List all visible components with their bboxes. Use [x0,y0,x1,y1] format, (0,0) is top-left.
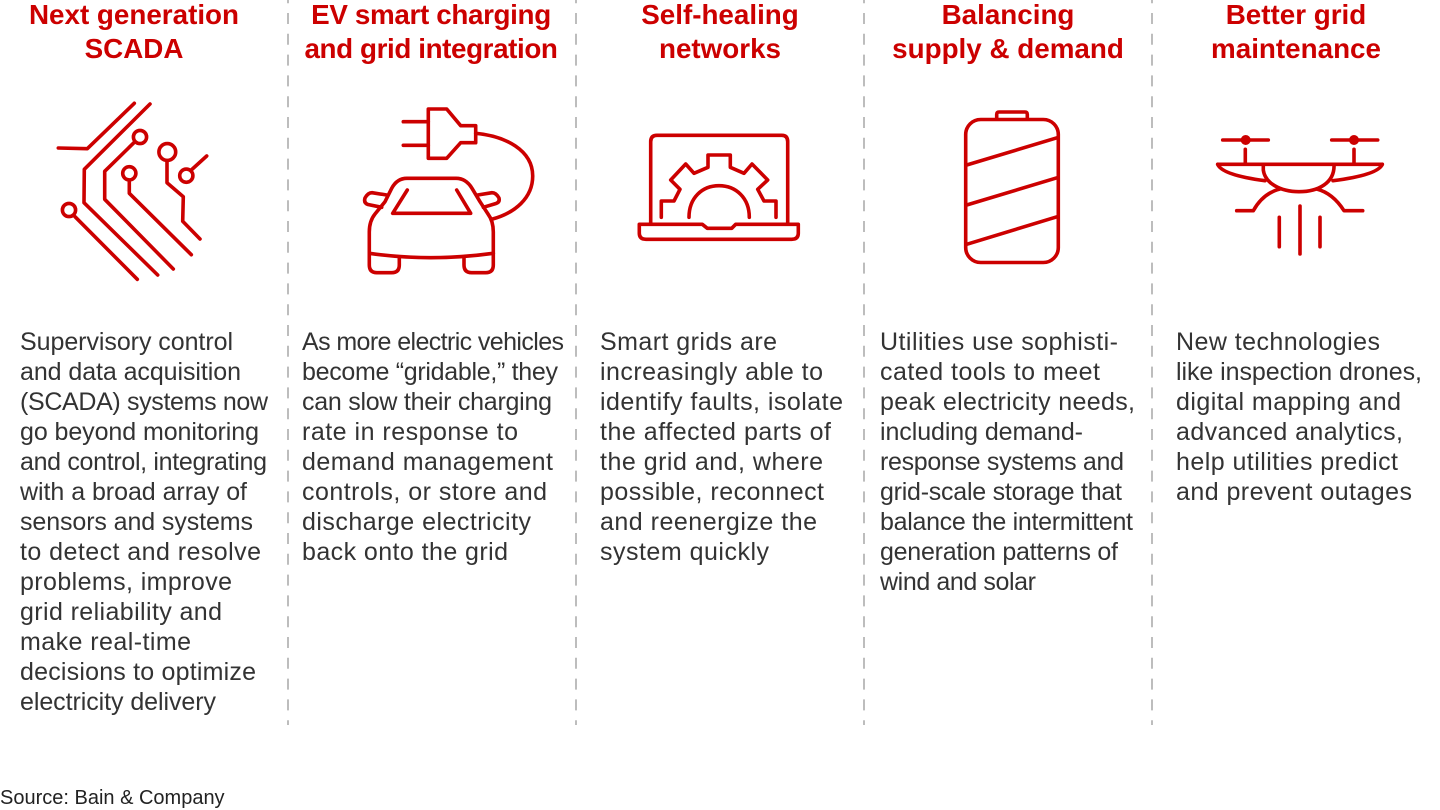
heading: self-healing networks: networks [659,33,781,64]
text: EV description [302,328,564,566]
text: self-healing description: increasingly able to [600,358,823,386]
heading: balancing supply and demand: supply & demand [892,33,1124,64]
text: self-healing description: Smart grids are [600,328,777,356]
text: SCADA description: (SCADA) systems now [20,388,269,416]
text: EV description: become “gridable,” they [302,358,558,386]
text: EV description: demand management [302,448,553,476]
text: balancing description: including demand- [880,418,1083,446]
text: self-healing description: the grid and, where [600,448,823,476]
text: maintenance description [1176,328,1422,506]
text: balancing description: response systems and [880,448,1124,476]
text: SCADA description: make real-time [20,628,191,656]
text: balancing description [879,328,1135,596]
text: maintenance description: digital mapping and [1176,388,1401,416]
text: balancing description: balance the intermittent [880,508,1133,536]
text: EV description: back onto the grid [302,538,508,566]
text: SCADA description: problems, improve [20,568,232,596]
text: self-healing description: the affected parts of [600,418,831,446]
icon: laptop with gear [638,134,800,242]
text: SCADA description: electricity delivery [20,688,216,716]
text: SCADA description: Supervisory control [20,328,233,356]
text: maintenance description: like inspection drones, [1176,358,1422,386]
text: SCADA description: grid reliability and [20,598,222,626]
icon: electric car with plug [362,107,534,274]
text: SCADA description: and control, integrating [20,448,267,476]
text: SCADA description: go beyond monitoring [20,418,259,446]
panel: EV smart charging [302,0,564,566]
text: EV description: As more electric vehicles [302,328,564,356]
heading: EV smart charging [304,0,557,64]
heading: better grid maintenance: maintenance [1211,33,1381,64]
source note: Source: Bain & Company [0,787,225,809]
text: SCADA description: to detect and resolve [20,538,261,566]
panel: better grid maintenance [1176,0,1422,506]
text: self-healing description: and reenergize the [600,508,817,536]
heading: self-healing networks [641,0,799,64]
heading: next generation SCADA [29,0,239,64]
text: balancing description: grid-scale storage that [880,478,1122,506]
text: self-healing description: system quickly [600,538,770,566]
text: balancing description: Utilities use sophisti- [880,328,1118,356]
text: EV description: controls, or store and [302,478,547,506]
text: self-healing description [600,328,843,566]
heading: better grid maintenance [1211,0,1381,64]
heading: balancing supply and demand [892,0,1124,64]
text: SCADA description: decisions to optimize [20,658,256,686]
panel: self-healing networks [600,0,843,566]
text: maintenance description: and prevent outages [1176,478,1412,506]
text: SCADA description: and data acquisition [20,358,241,386]
text: self-healing description: possible, reconnect [600,478,824,506]
heading: next generation SCADA: SCADA [85,33,183,64]
panel: balancing supply and demand [879,0,1135,596]
text: maintenance description: advanced analytics, [1176,418,1403,446]
text: EV description: can slow their charging [302,388,552,416]
text: EV description: rate in response to [302,418,518,446]
text: SCADA description: sensors and systems [20,508,253,536]
text: maintenance description: New technologies [1176,328,1380,356]
heading: EV smart charging: and grid integration [304,33,557,64]
text: balancing description: peak electricity needs, [880,388,1135,416]
text: SCADA description [19,328,269,716]
panel: next generation SCADA [19,0,269,716]
icon: circuit traces [56,101,209,282]
text: self-healing description: identify faults, isolate [600,388,843,416]
text: balancing description: wind and solar [879,568,1036,596]
text: SCADA description: with a broad array of [19,478,247,506]
text: balancing description: cated tools to meet [880,358,1100,386]
text: EV description: discharge electricity [302,508,532,536]
text: maintenance description: help utilities predict [1176,448,1398,476]
text: balancing description: generation patterns of [880,538,1118,566]
icon: battery [964,110,1060,264]
icon: inspection drone [1216,135,1384,256]
